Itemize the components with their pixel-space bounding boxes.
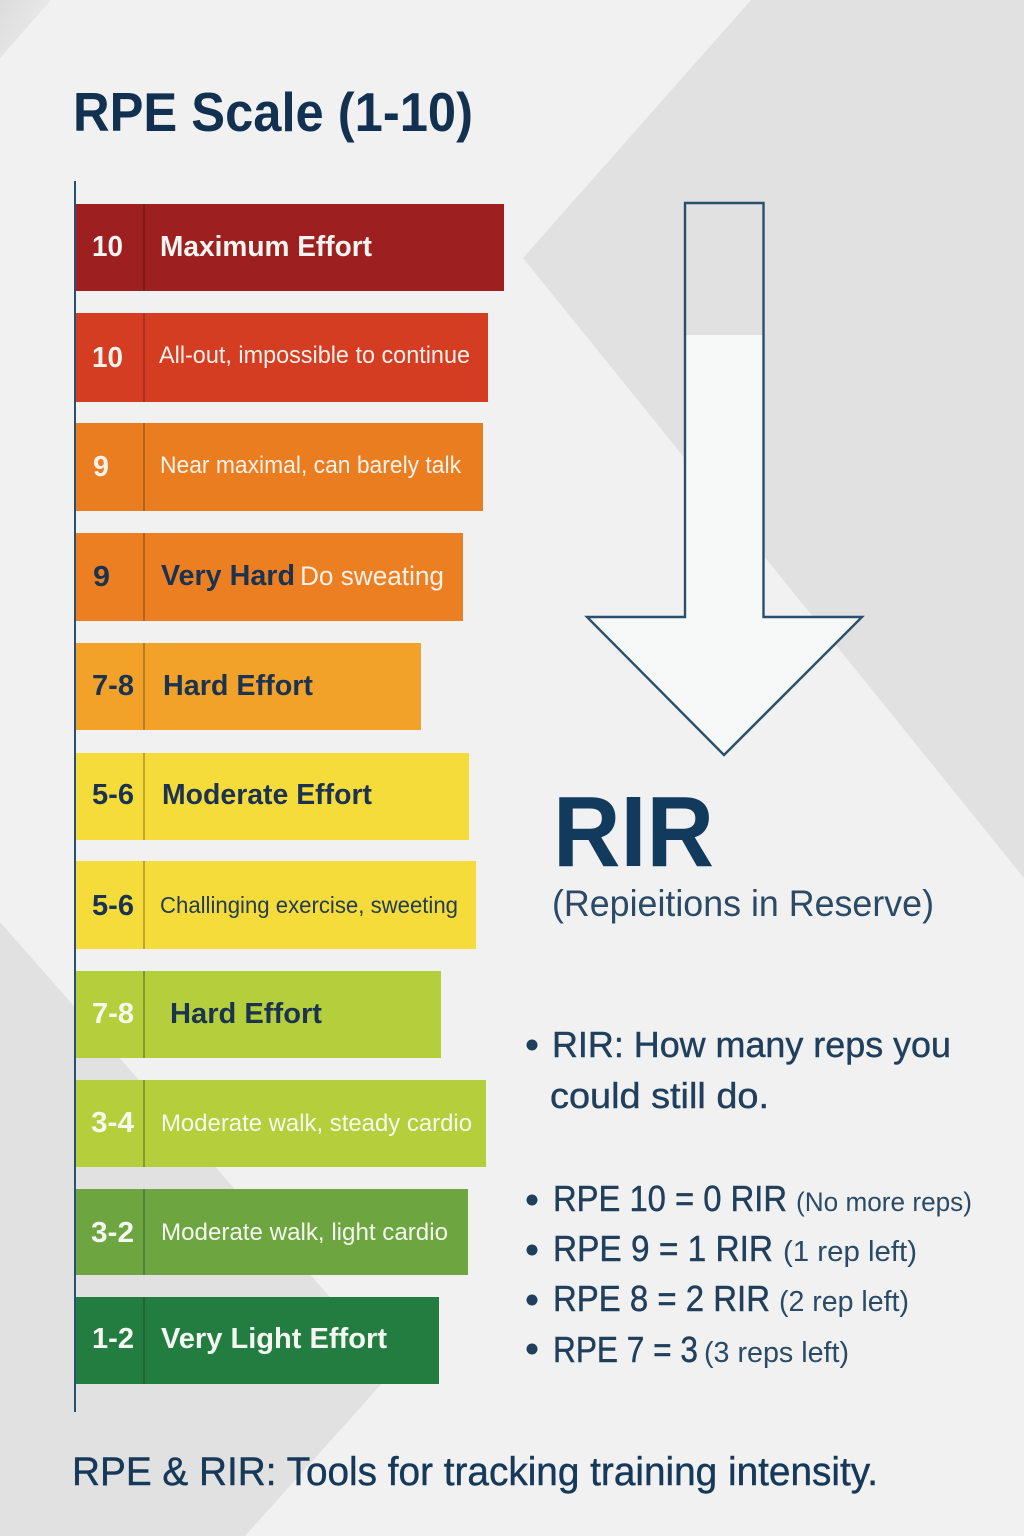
list item: RPE 9: (1 rep left) [783, 1236, 917, 1268]
list item: RPE 10: RPE 10 = 0 RIR [553, 1178, 787, 1219]
bar: 7-8 Hard Effort: 7-8 [92, 670, 134, 702]
text block: RIR definition: could still do. [550, 1075, 769, 1116]
text block: RIR definition: RIR: How many reps you [552, 1024, 951, 1065]
list item: RPE 7: (3 reps left) [704, 1337, 849, 1369]
list item: RPE 7: RPE 7 = 3 [553, 1329, 698, 1370]
list item: RPE 7 [526, 1329, 849, 1370]
bar: 7-8 Hard Effort: Hard Effort [163, 670, 313, 702]
subheading: Repetitions in Reserve: (Repieitions in Reserve) [552, 883, 934, 924]
list: RPE to RIR conversions [526, 1178, 972, 1370]
list item: RPE 9 [526, 1228, 917, 1269]
bar: 10 All-out: 10 [92, 342, 123, 374]
bar: 3-4 Moderate walk steady cardio [76, 1080, 486, 1167]
bar: 5-6 Challenging exercise [76, 861, 476, 949]
bar: 10 Maximum Effort [76, 204, 504, 291]
list item: RPE 10: (No more reps) [796, 1187, 972, 1217]
bar: 5-6 Challenging exercise: Challinging exercise, sweeting [160, 892, 458, 918]
bar: 10 Maximum Effort: Maximum Effort [160, 231, 372, 263]
bar: 7-8 Hard Effort [76, 643, 421, 730]
RPE scale chart [74, 181, 504, 1412]
list item: RPE 9: RPE 9 = 1 RIR [553, 1228, 773, 1269]
bar: 9 Very Hard: Do sweating [300, 561, 444, 591]
bar: 9 Near maximal [76, 423, 483, 511]
bar: 3-4 Moderate walk steady cardio: 3-4 [91, 1107, 134, 1139]
bar: 5-6 Moderate Effort: 5-6 [92, 779, 134, 811]
title: RPE Scale (1-10) [73, 81, 473, 143]
bar: 1-2 Very Light Effort: Very Light Effort [161, 1323, 387, 1355]
bar: 9 Very Hard [76, 533, 463, 621]
heading: RIR: RIR [553, 776, 714, 888]
bar: 3-4 Moderate walk steady cardio: Moderate walk, steady cardio [161, 1110, 472, 1137]
bar: 10 Maximum Effort: 10 [92, 231, 123, 263]
bar: 5-6 Moderate Effort: Moderate Effort [162, 779, 372, 811]
bar: 5-6 Challenging exercise: 5-6 [92, 890, 134, 922]
list item: RPE 8: (2 rep left) [779, 1286, 909, 1318]
bar: 9 Near maximal: Near maximal, can barely talk [160, 452, 462, 479]
bar: 9 Near maximal: 9 [93, 451, 109, 483]
list item: RPE 10 [526, 1178, 972, 1219]
bar: 7-8 Hard Effort light green: 7-8 [92, 998, 134, 1030]
bar: 3-2 Moderate walk light cardio: 3-2 [91, 1217, 134, 1249]
bar: 10 All-out: All-out, impossible to continue [159, 342, 470, 369]
bar: 1-2 Very Light Effort [76, 1297, 439, 1384]
arrow: RIR downward [586, 203, 863, 755]
bar: 7-8 Hard Effort light green: Hard Effort [170, 998, 322, 1030]
bar: 3-2 Moderate walk light cardio [76, 1189, 468, 1275]
bar: 1-2 Very Light Effort: 1-2 [92, 1323, 134, 1355]
bar: 9 Very Hard: 9 [93, 561, 110, 593]
footer caption: RPE & RIR: Tools for tracking training intensity. [72, 1450, 878, 1494]
bar: 3-2 Moderate walk light cardio: Moderate walk, light cardio [161, 1219, 448, 1246]
list item: RPE 8: RPE 8 = 2 RIR [553, 1278, 770, 1319]
axis line [74, 181, 76, 1412]
text block: RIR definition [526, 1024, 951, 1116]
bar: 9 Very Hard: Very Hard [161, 560, 295, 592]
list item: RPE 8 [526, 1278, 909, 1319]
bar: 10 All-out [76, 313, 488, 402]
bar: 7-8 Hard Effort light green [76, 971, 441, 1058]
bar: 5-6 Moderate Effort [76, 753, 469, 840]
